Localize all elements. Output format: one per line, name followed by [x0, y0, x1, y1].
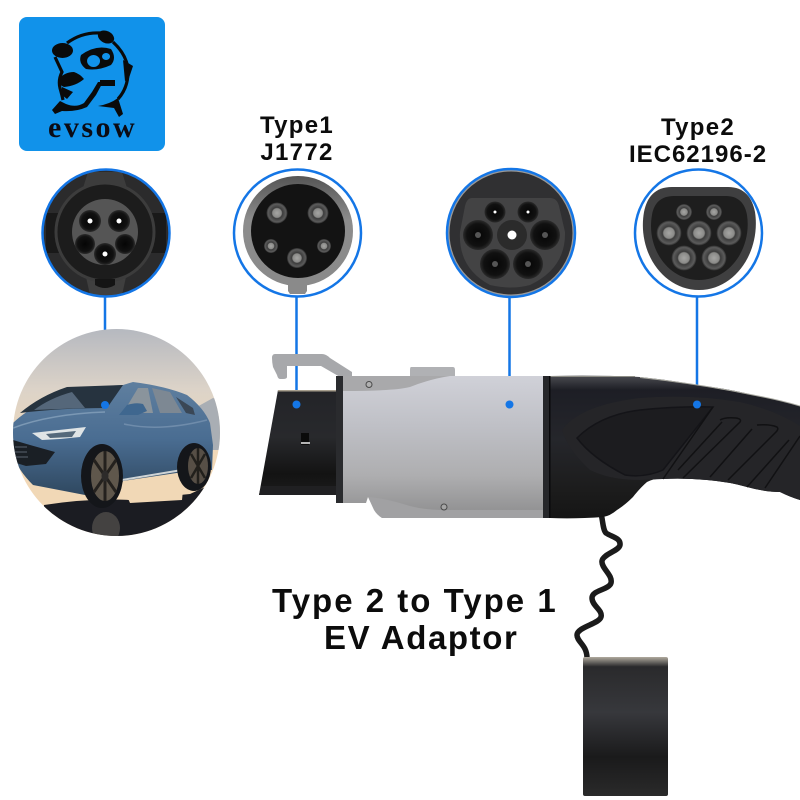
title: Type 2 to Type 1: [272, 582, 558, 619]
ground: [44, 487, 204, 536]
callout line: Type1 plug to adapter nose: [295, 296, 298, 404]
inner socket face: [72, 199, 138, 265]
mountain: [199, 398, 220, 450]
icon: panda mascot with plug: [52, 28, 133, 117]
label: Type1 J1772: J1772: [260, 139, 334, 166]
connector view: adapter Type 2 socket: [447, 169, 575, 297]
front wheel: [81, 444, 123, 508]
logo wordmark: evsow: [48, 111, 137, 144]
wheel reflection: [92, 512, 120, 536]
side windows: [128, 388, 153, 413]
connector view: vehicle inlet Type 1 side: [42, 170, 170, 296]
callout line: car inlet to car: [104, 296, 106, 405]
grille: [13, 440, 55, 466]
label: Type2 IEC62196-2: Type2: [661, 114, 735, 141]
callout line: Type2 socket to adapter body: [508, 296, 511, 404]
adapter: Type 1 nose: [259, 390, 336, 495]
car body: [13, 382, 213, 495]
logo: evsow: [19, 17, 165, 151]
rear wheel: [177, 443, 211, 491]
nose latch window: [301, 433, 309, 445]
photo: blue electric SUV: [10, 325, 225, 544]
label: Type1 J1772: [260, 112, 334, 166]
adapter: latch: [272, 354, 455, 379]
adapter: Type 2 handle: [550, 376, 800, 518]
title: EV Adaptor: [324, 619, 518, 656]
callout dots on product: [101, 400, 701, 409]
windshield: [20, 385, 123, 413]
grip outer panel: [562, 397, 800, 500]
release button: [410, 367, 455, 376]
body line: [124, 420, 207, 427]
connector view: Type1 J1772: [234, 170, 361, 296]
mirror: [119, 403, 147, 415]
hood highlight: [13, 412, 105, 428]
adapter: silver body: [343, 376, 543, 518]
callout line: Type2 plug to handle: [696, 296, 698, 404]
adapter: dark collar: [336, 376, 344, 503]
bottom trim: [368, 497, 543, 518]
title: [272, 582, 558, 656]
adapter: coiled cable: [577, 513, 620, 658]
connector view: Type2 IEC62196-2: [635, 170, 762, 296]
adapter: black collar ring: [543, 376, 550, 518]
grip ribs: [663, 407, 800, 488]
label: Type2 IEC62196-2: IEC62196-2: [629, 141, 767, 168]
label: Type1 J1772: Type1: [260, 112, 334, 139]
label: Type2 IEC62196-2: [629, 114, 767, 168]
headlight: [32, 427, 86, 440]
adapter: connector cap: [583, 657, 668, 796]
grip inner lens: [577, 407, 713, 476]
top trim: [343, 376, 450, 391]
